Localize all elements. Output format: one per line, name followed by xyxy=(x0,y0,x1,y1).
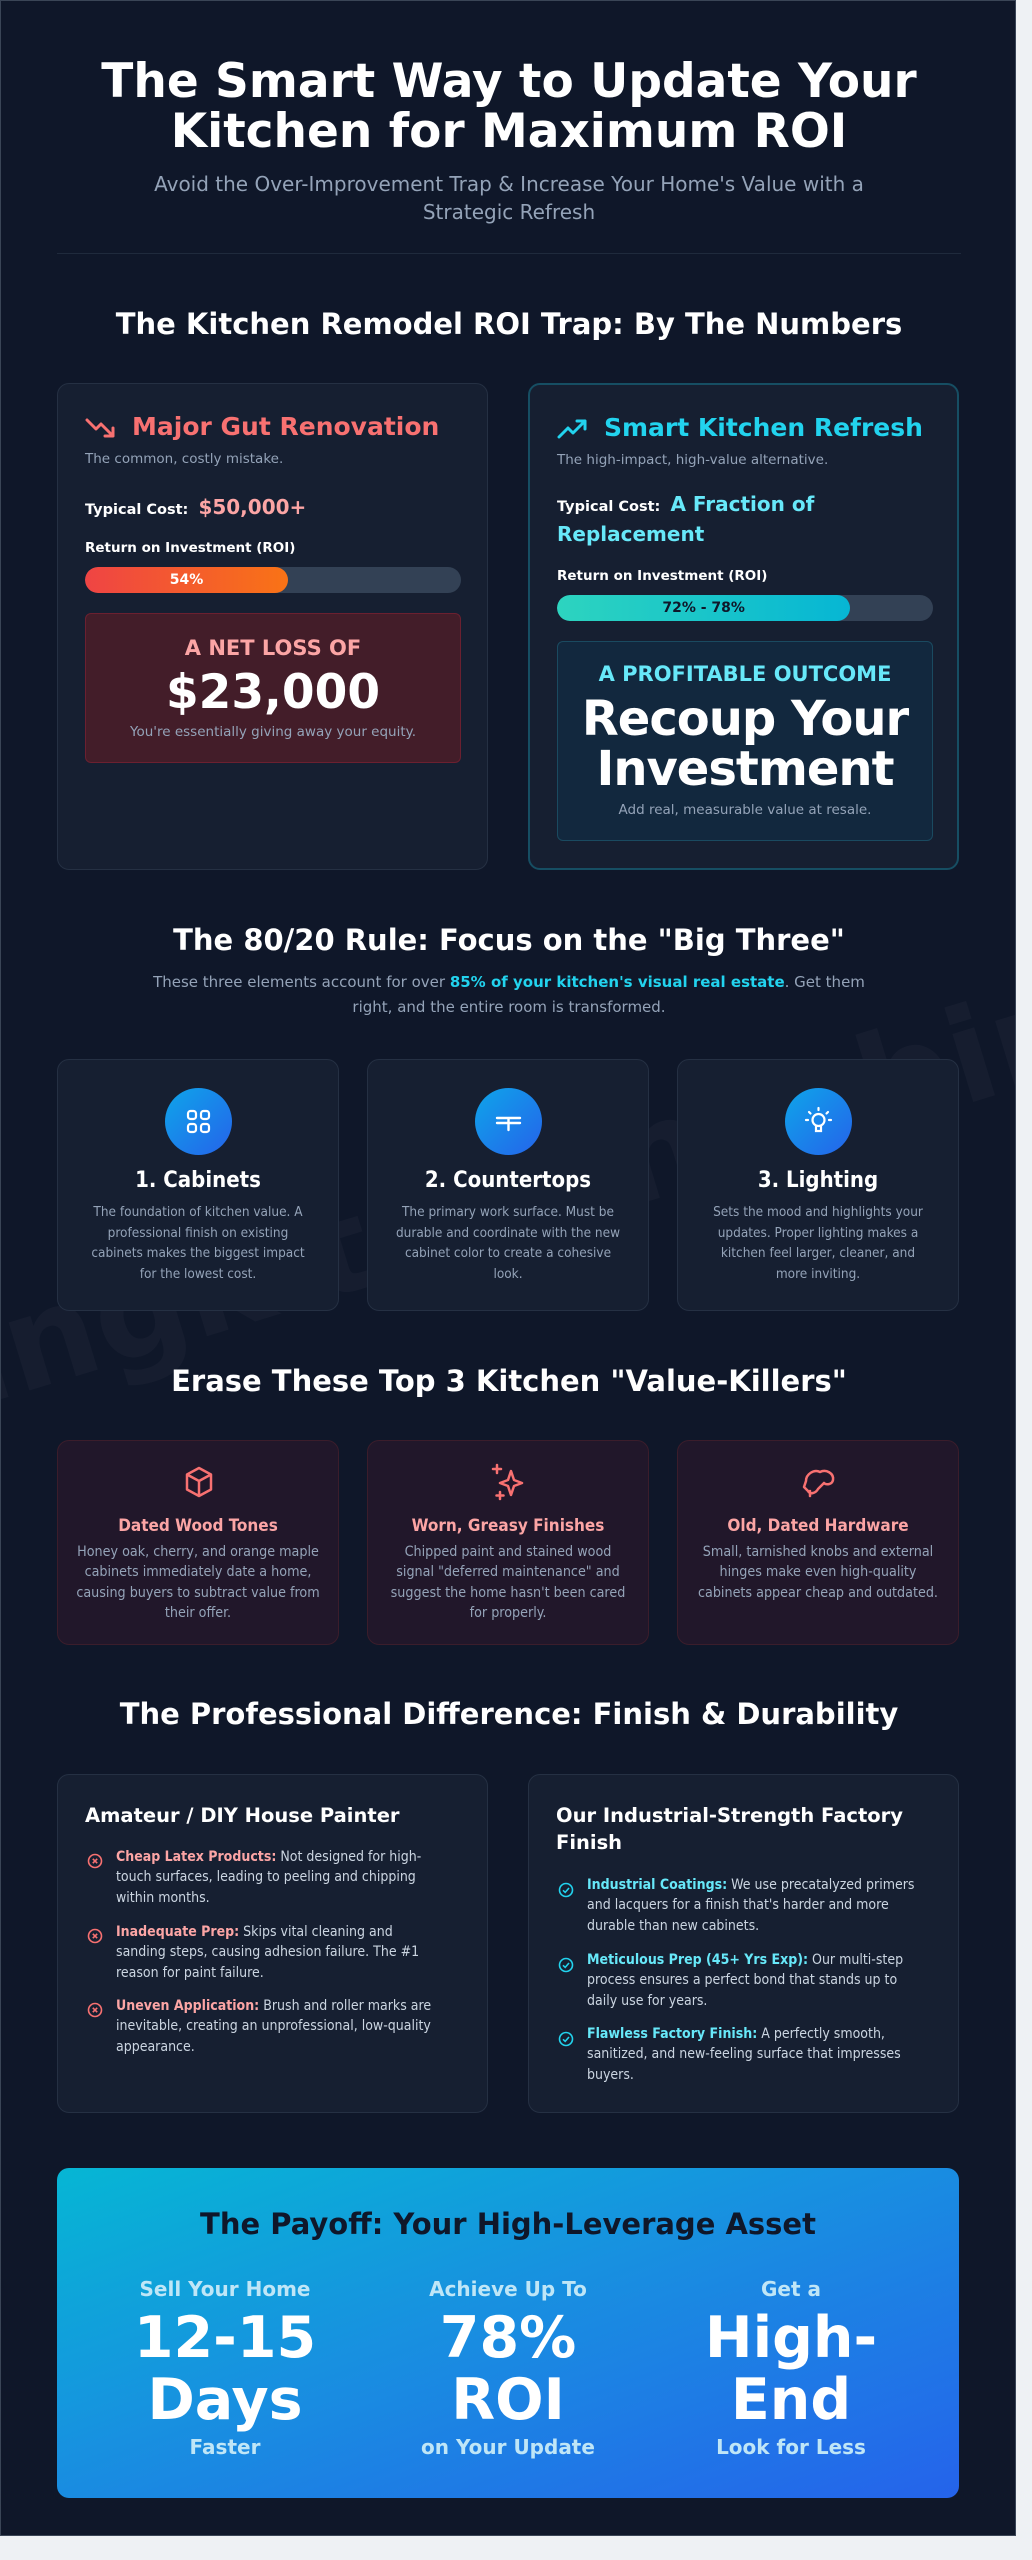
item: inadequate prep: Inadequate Prep: Skips vital cleaning and sanding steps, causing adhesion failure. The #1 reason for paint failure. xyxy=(116,1924,419,1981)
stat: ROI: ROI xyxy=(451,2367,565,2433)
stat: high-end: Get a xyxy=(761,2277,821,2301)
description: Small, tarnished knobs and external hinges make even high-quality cabinets appear cheap and outdated. xyxy=(698,1544,938,1601)
panel: dated wood tones xyxy=(57,1440,339,1645)
title: Old, Dated Hardware xyxy=(727,1516,909,1536)
stat: days faster: 12-15 xyxy=(134,2305,316,2371)
stat: ROI: Achieve Up To xyxy=(429,2277,587,2301)
stat: high-end xyxy=(705,2277,877,2459)
item: industrial coatings: Industrial Coatings: We use precatalyzed primers and lacquers for a finish that's harder and more durable than new cabinets. xyxy=(587,1877,914,1934)
subtitle: Avoid the Over-Improvement Trap & Increase Your Home's Value with a Strategic Refresh xyxy=(154,172,864,224)
item: flawless finish: Flawless Factory Finish: A perfectly smooth, sanitized, and new-feeling surface that impresses buyers. xyxy=(587,2026,901,2083)
stat: high-end: High- xyxy=(705,2305,877,2371)
title: Dated Wood Tones xyxy=(118,1516,278,1536)
item: uneven application: Uneven Application: Brush and roller marks are inevitable, creating an unprofessional, low-quality appearance. xyxy=(116,1998,431,2055)
icon: light bulb xyxy=(785,1088,852,1155)
panel: dated hardware xyxy=(677,1440,959,1645)
heading: ROI trap: The Kitchen Remodel ROI Trap: By The Numbers xyxy=(116,307,902,341)
heading: value killers: Erase These Top 3 Kitchen "Value-Killers" xyxy=(171,1364,847,1398)
title: 2. Countertops xyxy=(425,1168,591,1193)
panel: major gut renovation xyxy=(57,383,488,870)
panel: countertops xyxy=(367,1059,649,1311)
callout: net loss xyxy=(85,613,461,763)
stat: days faster: Sell Your Home xyxy=(140,2277,310,2301)
panel: payoff xyxy=(57,2168,959,2498)
callout: profitable outcome xyxy=(557,641,933,841)
icon: countertops xyxy=(475,1088,542,1155)
stat: ROI: on Your Update xyxy=(421,2435,595,2459)
panel: amateur painter xyxy=(57,1774,488,2113)
callout: net loss: You're essentially giving away your equity. xyxy=(130,724,416,740)
title: 1. Cabinets xyxy=(135,1168,261,1193)
icon: hardware xyxy=(802,1470,834,1498)
panel: cabinets xyxy=(57,1059,339,1311)
card subtitle: The high-impact, high-value alternative. xyxy=(557,452,828,468)
description: The primary work surface. Must be durable and coordinate with the new cabinet color to create a cohesive look. xyxy=(396,1204,620,1282)
stat: high-end: Look for Less xyxy=(716,2435,866,2459)
title: Amateur / DIY House Painter xyxy=(85,1804,400,1827)
title xyxy=(101,54,917,159)
description: The foundation of kitchen value. A professional finish on existing cabinets makes the biggest impact for the lowest cost. xyxy=(91,1204,305,1282)
card subtitle: The common, costly mistake. xyxy=(85,451,283,467)
title: Our Industrial-Strength Factory Finish xyxy=(556,1804,903,1854)
panel: lighting xyxy=(677,1059,959,1311)
icon: cube xyxy=(186,1466,212,1498)
ROI label: Return on Investment (ROI) xyxy=(557,568,767,584)
ROI label: Return on Investment (ROI) xyxy=(85,540,295,556)
stat: ROI xyxy=(421,2277,595,2459)
icon: trending down xyxy=(85,418,115,438)
stat: ROI: 78% xyxy=(440,2305,576,2371)
callout: profitable outcome: A PROFITABLE OUTCOME xyxy=(599,662,891,686)
stat: days faster: Faster xyxy=(190,2435,260,2459)
callout: profitable outcome: Add real, measurable value at resale. xyxy=(619,802,871,818)
icon: cabinets xyxy=(165,1088,232,1155)
payoff title: The Payoff: Your High-Leverage Asset xyxy=(200,2207,816,2241)
item: meticulous prep: Meticulous Prep (45+ Yrs Exp): Our multi-step process ensures a perfect bond that stands up to daily use for years. xyxy=(587,1952,903,2009)
card title: Smart Kitchen Refresh xyxy=(604,413,923,442)
callout: net loss: $23,000 xyxy=(166,665,380,720)
heading: 80/20 rule: The 80/20 Rule: Focus on the "Big Three" xyxy=(173,923,845,957)
ROI bar 72-78% xyxy=(557,595,933,621)
panel: worn finishes xyxy=(367,1440,649,1645)
ROI bar 54% xyxy=(85,567,461,593)
description: Chipped paint and stained wood signal "deferred maintenance" and suggest the home hasn't been cared for properly. xyxy=(391,1544,625,1621)
typical cost: Typical Cost: A Fraction of Replacement xyxy=(557,492,814,546)
title: Kitchen for Maximum ROI xyxy=(171,104,847,159)
heading: professional difference: The Professional Difference: Finish & Durability xyxy=(120,1697,898,1731)
icon: trending up xyxy=(557,419,587,439)
stat: high-end: End xyxy=(731,2367,851,2433)
callout: net loss: A NET LOSS OF xyxy=(185,636,361,660)
panel: smart kitchen refresh xyxy=(528,383,959,870)
stat: days faster xyxy=(134,2277,316,2459)
ROI bar 54%: 54% xyxy=(170,572,203,588)
typical cost: Typical Cost: $50,000+ xyxy=(85,495,306,519)
description: Sets the mood and highlights your updates. Proper lighting makes a kitchen feel larger, cleaner, and more inviting. xyxy=(713,1204,923,1282)
intro text: These three elements account for over 85% of your kitchen's visual real estate. Get them right, and the entire room is transformed. xyxy=(153,973,865,1016)
ROI bar 72-78%: 72% - 78% xyxy=(662,600,745,616)
title: The Smart Way to Update Your xyxy=(101,54,917,109)
card title: Major Gut Renovation xyxy=(132,412,439,441)
callout: profitable outcome: Recoup Your Investment xyxy=(582,691,908,797)
panel: factory finish xyxy=(528,1774,959,2113)
title: 3. Lighting xyxy=(758,1168,878,1193)
stat: days faster: Days xyxy=(147,2367,303,2433)
description: Honey oak, cherry, and orange maple cabinets immediately date a home, causing buyers to subtract value from their offer. xyxy=(76,1544,320,1621)
icon: sparkles xyxy=(492,1464,524,1500)
item: cheap latex: Cheap Latex Products: Not designed for high-touch surfaces, leading to peeling and chipping within months. xyxy=(116,1849,421,1906)
title: Worn, Greasy Finishes xyxy=(412,1516,604,1536)
